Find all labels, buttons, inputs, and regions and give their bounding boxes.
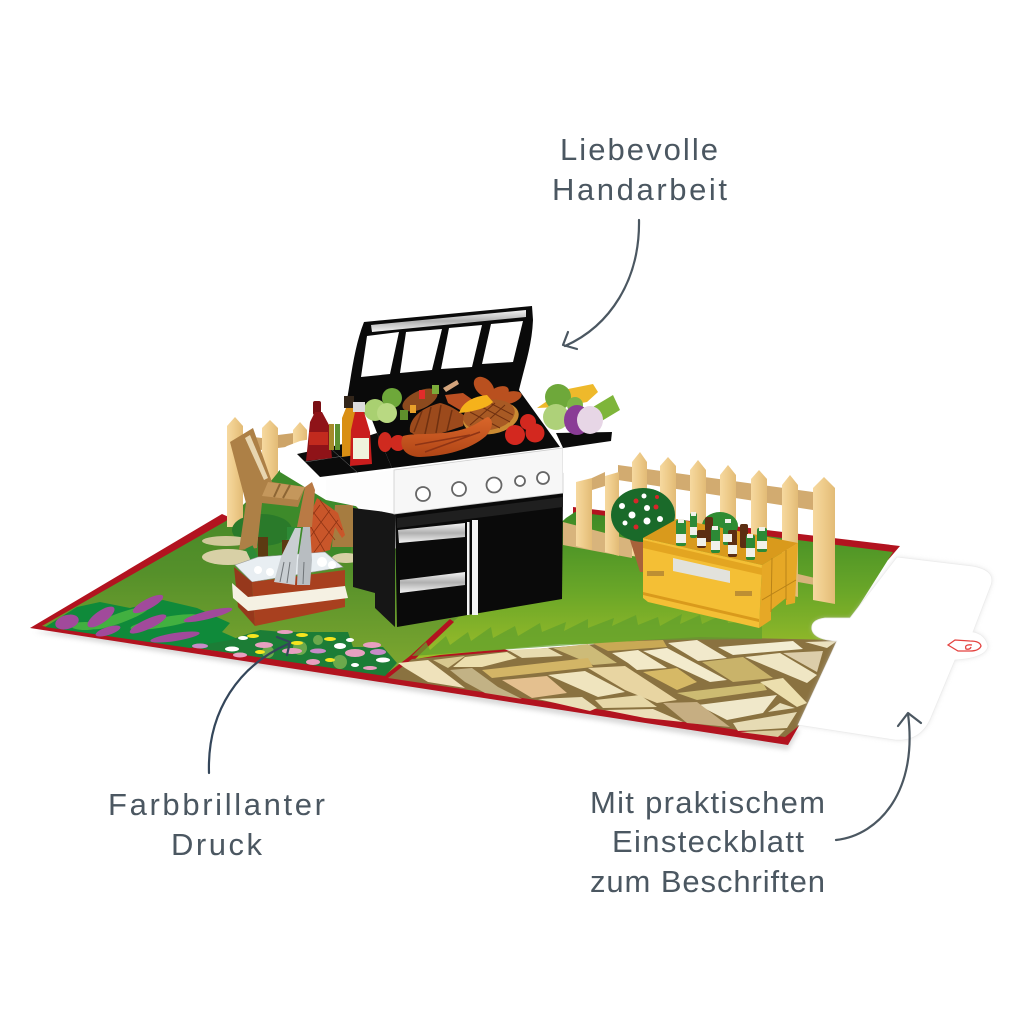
corn [537,384,598,408]
upper drawer handle [398,523,465,543]
bone [443,380,459,392]
paving stones [388,637,837,737]
insert sheet [798,557,992,740]
crate interior [643,519,798,565]
lower rail [563,522,632,558]
label: Mit praktischem Einsteckblatt zum Beschriften: Mit praktischem [590,785,825,820]
lettuce left [364,388,402,423]
grill cabinet [353,493,563,627]
red onion [564,405,603,435]
left shelf side [280,430,392,500]
card red base [30,514,800,745]
sausage behind [445,393,473,410]
control panel [394,448,563,514]
chair [230,428,305,550]
label: Farbbrillanter Druck: Farbbrillanter [108,787,325,822]
skewer [399,384,441,420]
sauce bottle red [306,401,332,461]
left grass panel [42,470,460,675]
right shelf [563,438,623,473]
ice bed [235,552,343,582]
pop-up card illustration [30,306,992,750]
lid top bar [371,310,526,332]
tomatoes left [378,432,406,452]
knobs [416,472,549,501]
arrow to lid [563,220,639,349]
steak [461,396,521,439]
grate lines [305,448,358,473]
ice cooler [232,482,348,626]
orange slice [459,395,493,413]
cooler bottles [245,527,295,572]
cooler front [252,570,345,626]
label: Mit praktischem Einsteckblatt zum Beschriften [590,785,825,899]
tomatoes right [505,414,544,445]
lettuce right [543,384,583,430]
rose bush [611,488,675,572]
mustard bottle [342,396,358,457]
left black grate [297,433,392,477]
small bottles [329,424,340,450]
cooler white band [232,583,348,611]
oven mitt [305,498,345,555]
grill lid [347,306,560,468]
crate window [673,558,730,583]
right black grate [556,432,612,448]
crate handles [647,571,664,576]
vent strip [397,497,563,528]
crate front [643,538,762,628]
right fence [563,452,835,604]
ribs [410,403,466,436]
label: Liebevolle Handarbeit: Liebevolle [560,132,718,167]
label: Farbbrillanter Druck: Druck [171,827,262,862]
lower drawer handle [400,572,465,593]
icon: heart logo [948,640,981,651]
grill food [306,373,620,466]
rear sausages [470,373,523,408]
lid windows [361,321,523,377]
front panel [395,493,563,627]
cooler side [234,567,255,626]
grass fringe [412,613,762,656]
card soft shadow [34,630,800,750]
large sausage [401,417,492,457]
centre fold line [384,619,454,681]
left shelf front [326,470,394,514]
bush behind crate [702,512,738,540]
crate right side [759,543,798,628]
bottles [676,512,767,560]
arrow to insert sheet [836,713,921,840]
grill top white body [280,430,623,514]
right grass panel [410,512,893,660]
arrow to flowers [209,637,290,773]
door divider strips [467,522,470,615]
side panel [353,508,395,627]
rear brown board [332,505,353,547]
grill tools [274,482,315,585]
label: Mit praktischem Einsteckblatt zum Beschriften: Einsteckblatt [612,824,804,859]
label: Farbbrillanter Druck [108,787,325,862]
back red edge [573,507,900,560]
insert outline shadow [798,557,992,740]
flowers: purple lupins [45,592,240,648]
label: Liebevolle Handarbeit [552,132,727,207]
label: Liebevolle Handarbeit: Handarbeit [552,172,727,207]
left fence [227,417,307,527]
beer crate [643,512,798,628]
insert body [798,557,992,740]
back lawn and paths behind chair [202,470,360,565]
ketchup bottle [350,402,372,466]
label: Mit praktischem Einsteckblatt zum Beschriften: zum Beschriften [590,864,825,899]
flowers: meadow [190,630,397,676]
black grates [297,432,612,501]
upper rail [618,465,813,510]
asparagus [593,395,620,422]
